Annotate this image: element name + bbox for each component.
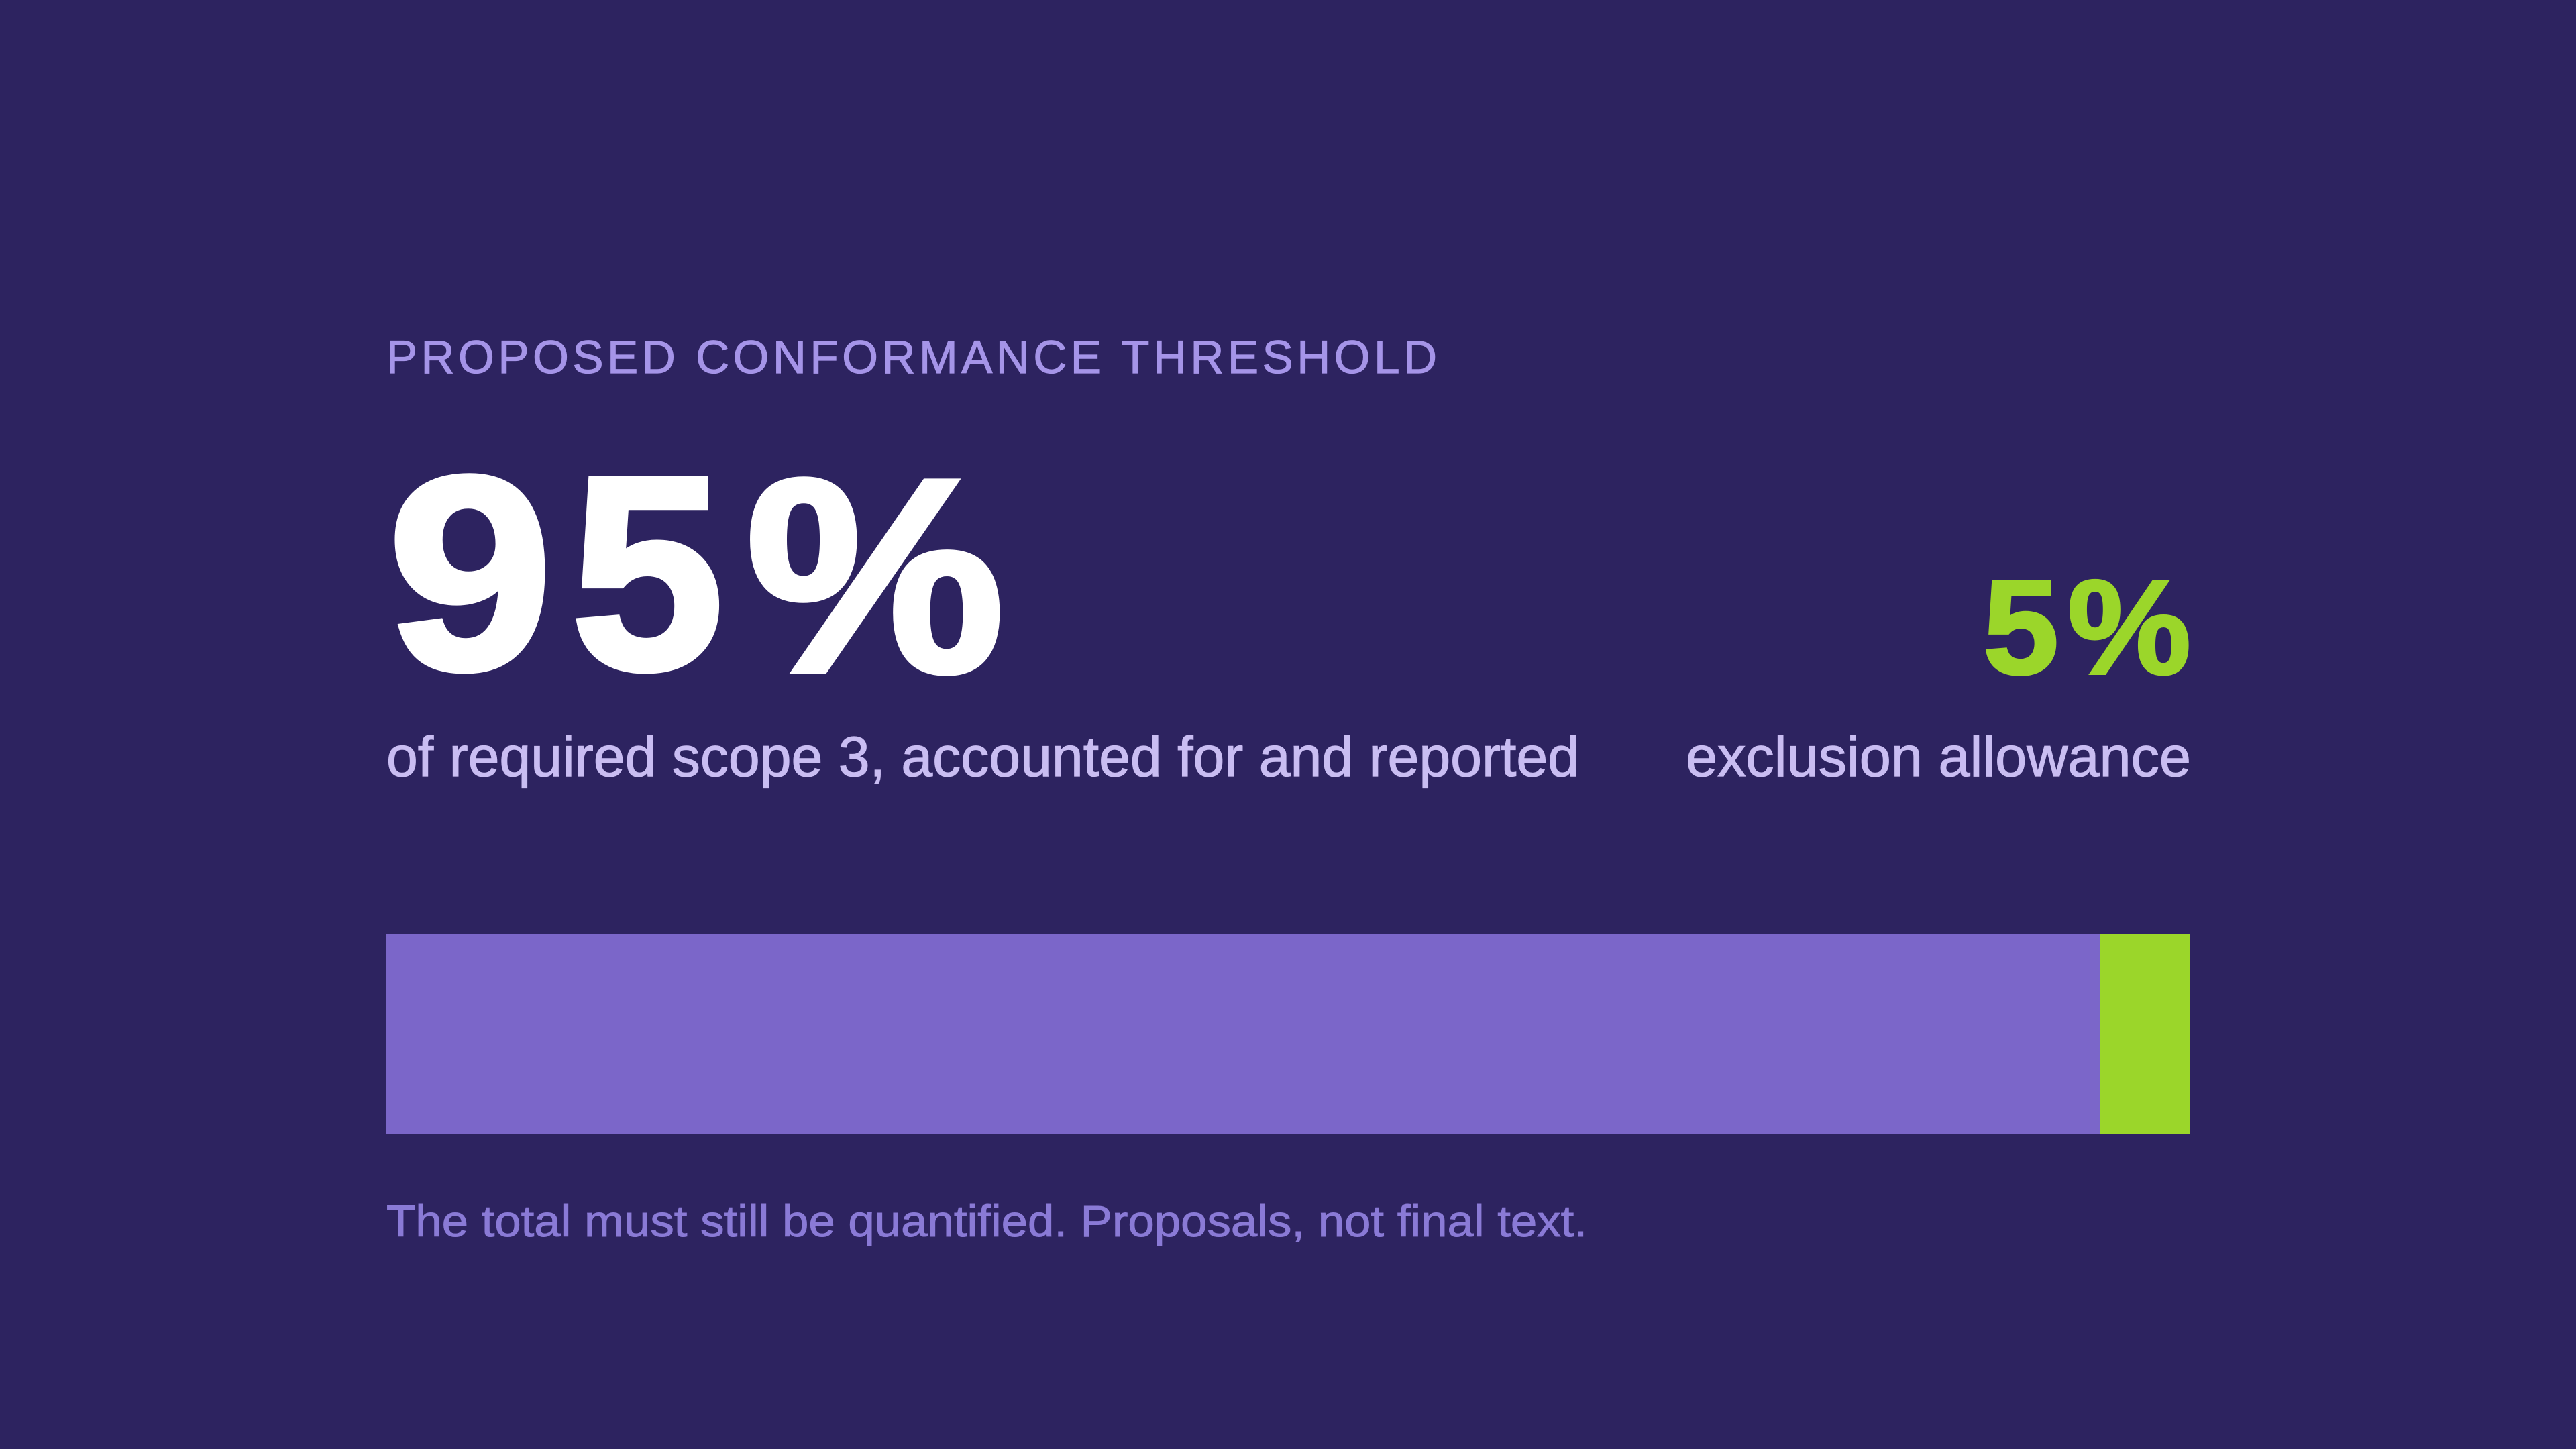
bar segment: 95 percent xyxy=(386,934,2100,1134)
big stat: 95% xyxy=(388,419,1004,729)
heading: proposed conformance threshold: PROPOSED CONFORMANCE THRESHOLD xyxy=(386,331,1437,383)
big stat: 95%: 5 xyxy=(571,419,724,727)
stat: 5% xyxy=(1983,553,2191,702)
caption: of required scope 3: of required scope 3, accounted for and reported xyxy=(386,725,1579,788)
caption: exclusion allowance: exclusion allowance xyxy=(1686,725,2191,788)
bar segment: 5 percent xyxy=(2100,934,2190,1134)
stat: 5%: 5 xyxy=(1983,553,2059,702)
big stat: 95%: % xyxy=(746,422,1004,729)
stat: 5%: % xyxy=(2068,553,2191,702)
progress bar xyxy=(386,934,2190,1134)
big stat: 95%: 9 xyxy=(388,419,553,727)
footnote: The total must still be quantified. Proposals, not final text. xyxy=(386,1196,1587,1246)
